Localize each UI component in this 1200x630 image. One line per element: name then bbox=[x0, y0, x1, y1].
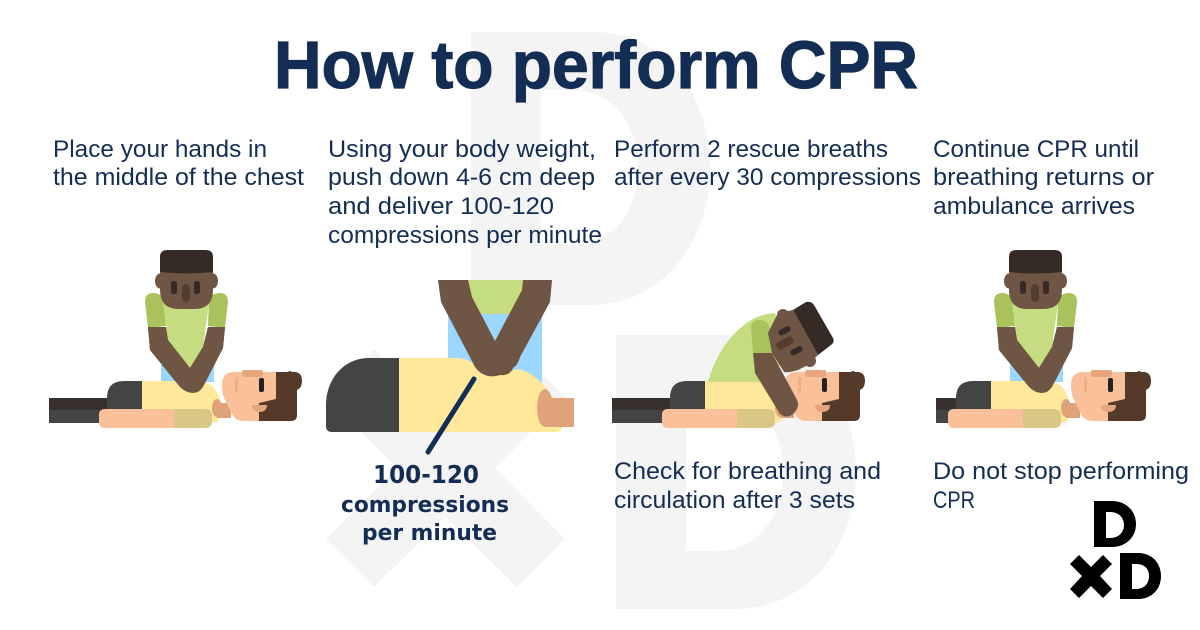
step 1 text bbox=[53, 136, 304, 191]
illustration: close-up of hands on chest, step 2 bbox=[326, 280, 574, 432]
step 3 text bbox=[614, 136, 921, 191]
callout line to chest bbox=[428, 379, 474, 452]
step 2 text: push down 4-6 cm deep bbox=[328, 164, 595, 191]
step 3 text: after every 30 compressions bbox=[614, 164, 921, 191]
callout: compression rate bbox=[341, 460, 509, 546]
step 4 note bbox=[933, 458, 1189, 514]
title: How to perform CPR bbox=[274, 28, 918, 103]
step 4 note: CPR bbox=[933, 487, 975, 514]
step 3 note: circulation after 3 sets bbox=[614, 487, 855, 514]
step 2 text: compressions per minute bbox=[328, 222, 602, 249]
illustration: compressions on patient, step 1 bbox=[49, 250, 302, 428]
step 4 text: Continue CPR until bbox=[933, 136, 1139, 163]
step 4 note: Do not stop performing bbox=[933, 458, 1189, 485]
step 2 text: Using your body weight, bbox=[328, 136, 596, 163]
illustration: rescue breaths, step 3 bbox=[612, 302, 865, 428]
callout: compression rate: compressions bbox=[341, 493, 509, 518]
step 3 note bbox=[614, 458, 881, 514]
step 4 text: ambulance arrives bbox=[933, 193, 1135, 220]
callout: compression rate: 100-120 bbox=[373, 460, 479, 489]
step 2 text: and deliver 100-120 bbox=[328, 193, 554, 220]
step 1 text: Place your hands in bbox=[53, 136, 267, 163]
callout: compression rate: per minute bbox=[362, 521, 497, 546]
logo: DxD bbox=[1070, 501, 1161, 599]
watermark: large DxD logo bbox=[326, 32, 856, 609]
step 4 text bbox=[933, 136, 1154, 220]
illustration: continued compressions, step 4 bbox=[936, 250, 1151, 428]
step 4 text: breathing returns or bbox=[933, 164, 1154, 191]
step 1 text: the middle of the chest bbox=[53, 164, 304, 191]
step 3 note: Check for breathing and bbox=[614, 458, 881, 485]
step 3 text: Perform 2 rescue breaths bbox=[614, 136, 888, 163]
step 2 text bbox=[328, 136, 602, 249]
